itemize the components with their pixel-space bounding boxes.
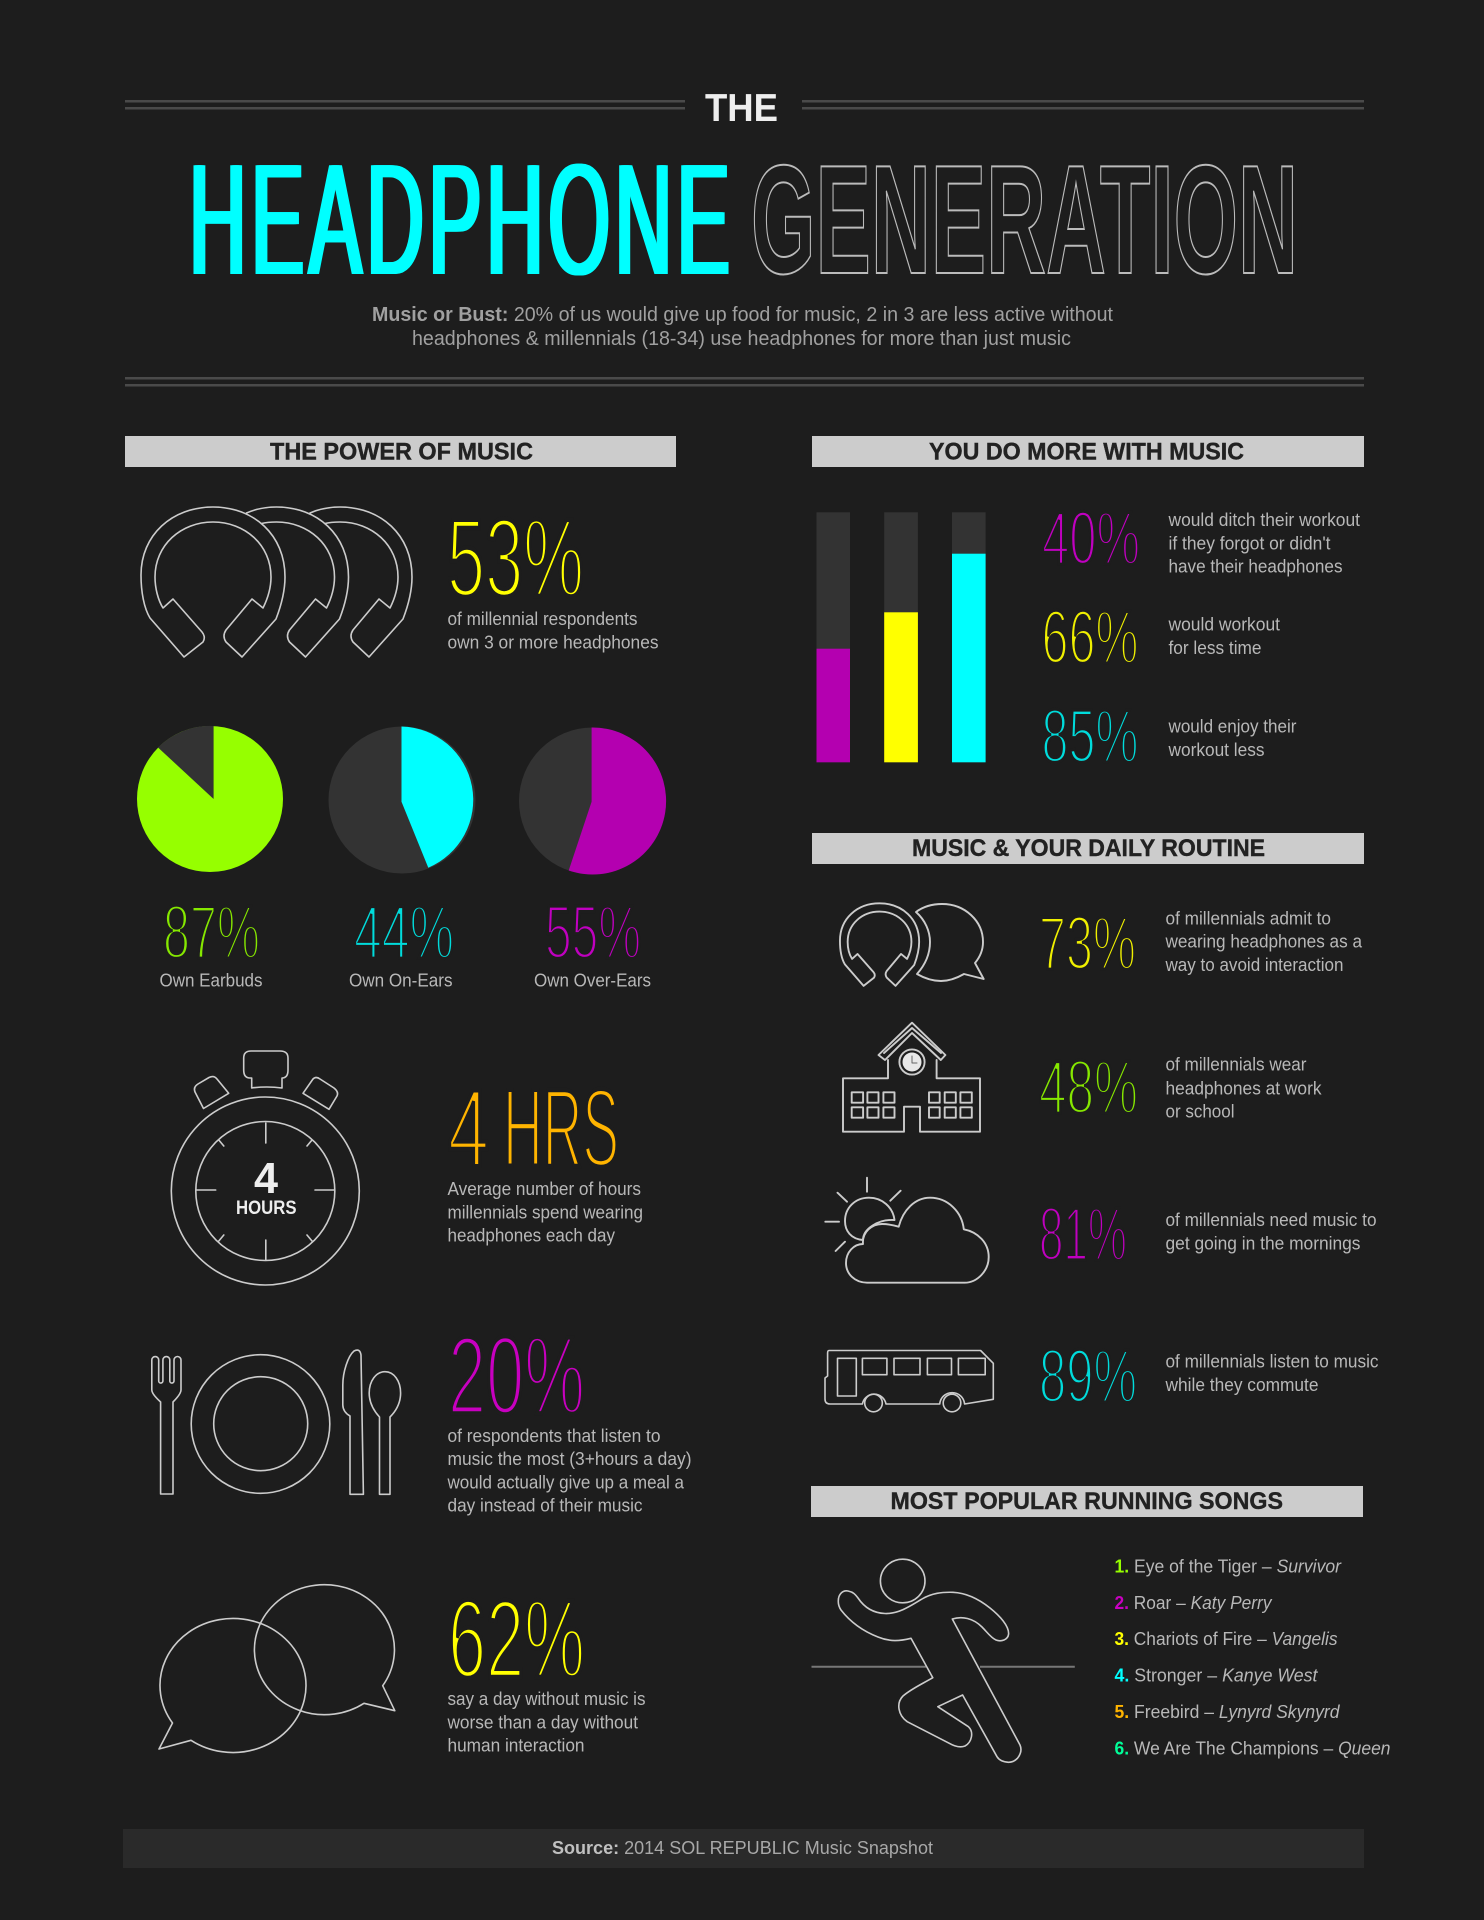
stat: 55% own over-ears: 55%: [545, 890, 641, 974]
text: 48% caption: [1166, 1054, 1322, 1122]
text: 20% caption: would actually give up a meal a: [447, 1472, 685, 1492]
heading: music and your daily routine: MUSIC & YOUR DAILY ROUTINE: [912, 836, 1265, 862]
text: 40% caption: have their headphones: [1168, 556, 1342, 576]
heading: you do more with music: YOU DO MORE WITH MUSIC: [929, 440, 1244, 466]
text: 53% caption: [448, 608, 658, 652]
icon: sun and cloud: [825, 1178, 989, 1283]
text: 62% caption: worse than a day without: [447, 1712, 638, 1732]
text: 62% caption: human interaction: [448, 1734, 584, 1756]
heading: the power of music: [125, 436, 676, 467]
text: 40% caption: [1168, 509, 1360, 576]
bar chart: workout effects: [816, 512, 986, 762]
list: running songs: 1. Eye of the Tiger – Survivor: [1114, 1556, 1342, 1576]
icon: headphones and speech bubble: [840, 903, 984, 986]
icon: stopwatch: [171, 1051, 359, 1285]
heading: most popular running songs: [811, 1486, 1363, 1517]
stat: 44% own on-ears: 44%: [354, 890, 454, 974]
list: running songs: 4. Stronger – Kanye West: [1114, 1664, 1318, 1686]
text: 40% caption: if they forgot or didn't: [1168, 532, 1330, 554]
icon: runner: [812, 1559, 1075, 1762]
text: 73% caption: of millennials admit to: [1166, 908, 1331, 928]
text: 4 HRS caption: [448, 1178, 643, 1246]
text: 20% caption: music the most (3+hours a day): [448, 1448, 692, 1469]
title: HEADPHONE: HEADPHONE: [187, 132, 732, 308]
subtitle: headphones & millennials (18-34) use headphones for more than just music: [412, 328, 1071, 350]
list: running songs: 2. Roar – Katy Perry: [1114, 1592, 1273, 1613]
panel: the power of music: [125, 436, 692, 1756]
pie chart: earbuds 87%: [137, 726, 283, 872]
list: running songs: 5. Freebird – Lynyrd Skynyrd: [1114, 1701, 1340, 1722]
stat: 4 HRS: 4: [448, 1067, 489, 1190]
stat: 4 HRS: [448, 1067, 619, 1190]
text: 66% caption: would workout: [1168, 614, 1280, 634]
panel: the power of music: HRS: [503, 1067, 619, 1190]
text: 53% caption: of millennial respondents: [448, 608, 638, 629]
text: 4 HRS caption: millennials spend wearing: [448, 1202, 643, 1222]
text: 85% caption: would enjoy their: [1168, 716, 1296, 736]
text: 81% caption: [1166, 1209, 1376, 1254]
stat: 62%: 62%: [448, 1578, 585, 1701]
text: 89% caption: [1165, 1350, 1378, 1395]
list: running songs: 3. Chariots of Fire – Vangelis: [1114, 1628, 1338, 1649]
stat: 66%: 66%: [1042, 595, 1138, 679]
text: 62% caption: say a day without music is: [448, 1688, 646, 1709]
text: 81% caption: get going in the mornings: [1166, 1232, 1360, 1254]
text: 20% caption: of respondents that listen to: [448, 1425, 660, 1446]
subtitle: Music or Bust: 20% of us would give up food for music, 2 in 3 are less active without: [372, 304, 1113, 326]
text: 73% caption: [1165, 908, 1363, 975]
stat: 40%: 40%: [1042, 496, 1140, 580]
text: 4 HRS caption: Average number of hours: [448, 1178, 641, 1199]
text: 73% caption: way to avoid interaction: [1165, 954, 1344, 975]
stat: 55% own over-ears: [534, 890, 651, 990]
icon: stopwatch: HOURS: [236, 1198, 296, 1219]
panel: most popular running songs: [811, 1486, 1390, 1762]
heading: you do more with music: [812, 436, 1364, 467]
text: 73% caption: wearing headphones as a: [1165, 930, 1363, 952]
stat: 55% own over-ears: Own Over-Ears: [534, 970, 651, 990]
stat: 87% own earbuds: 87%: [163, 890, 260, 974]
stat: 81%: 81%: [1039, 1192, 1127, 1276]
heading: most popular running songs: MOST POPULAR RUNNING SONGS: [890, 1489, 1283, 1515]
subtitle: [372, 304, 1113, 350]
stat: 87% own earbuds: Own Earbuds: [160, 970, 262, 990]
icon: bus: [825, 1350, 993, 1412]
list: running songs: 6. We Are The Champions – Queen: [1114, 1738, 1390, 1758]
text: 62% caption: [447, 1688, 646, 1756]
pie chart: on-ears 44%: [328, 726, 476, 874]
title: THE: THE: [705, 87, 778, 130]
panel: music and your daily routine: [812, 833, 1378, 1418]
icon: three headphones: [141, 507, 412, 657]
icon: stopwatch: 4: [254, 1155, 278, 1203]
stat: 87% own earbuds: [160, 890, 262, 990]
stat: 85%: 85%: [1042, 694, 1138, 778]
text: 85% caption: workout less: [1168, 739, 1264, 760]
stat: 44% own on-ears: Own On-Ears: [349, 970, 452, 990]
text: 66% caption: [1168, 614, 1280, 658]
icon: school building: [843, 1023, 980, 1132]
stat: 89%: 89%: [1039, 1334, 1137, 1418]
text: 85% caption: [1168, 716, 1296, 760]
stat: 48%: 48%: [1039, 1045, 1138, 1129]
text: 89% caption: of millennials listen to music: [1166, 1350, 1378, 1372]
text: 66% caption: for less time: [1168, 637, 1262, 658]
text: 89% caption: while they commute: [1165, 1374, 1318, 1395]
stat: 73%: 73%: [1039, 901, 1136, 985]
stat: 44% own on-ears: [349, 890, 454, 990]
stat: 20%: 20%: [448, 1314, 585, 1438]
text: 40% caption: would ditch their workout: [1168, 509, 1360, 530]
text: 81% caption: of millennials need music to: [1166, 1209, 1376, 1230]
text: 48% caption: of millennials wear: [1166, 1054, 1306, 1074]
heading: the power of music: THE POWER OF MUSIC: [270, 440, 533, 466]
icon: plate and cutlery: [152, 1350, 401, 1494]
list: running songs: [1114, 1556, 1390, 1758]
text: 48% caption: headphones at work: [1166, 1078, 1322, 1098]
heading: music and your daily routine: [812, 833, 1364, 864]
text: 4 HRS caption: headphones each day: [448, 1224, 616, 1246]
stat: 53%: 53%: [447, 497, 584, 620]
text: 20% caption: day instead of their music: [448, 1494, 642, 1516]
panel: you do more with music: [812, 436, 1364, 778]
footer: source: Source: 2014 SOL REPUBLIC Music Snapshot: [552, 1837, 933, 1858]
text: 48% caption: or school: [1166, 1100, 1234, 1122]
text: 53% caption: own 3 or more headphones: [448, 632, 658, 652]
pie chart: over-ears 55%: [519, 727, 666, 874]
icon: speech bubbles: [159, 1585, 395, 1752]
footer: source: [123, 1829, 1364, 1868]
text: 20% caption: [447, 1425, 692, 1516]
